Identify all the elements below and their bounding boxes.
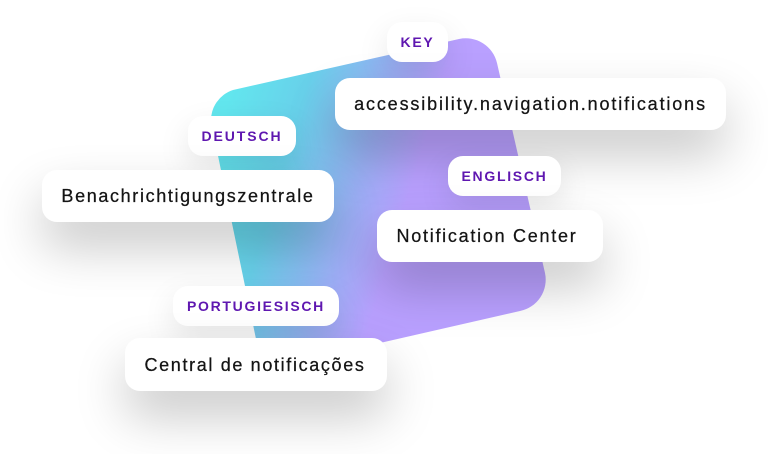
key label: KEY <box>401 34 434 50</box>
english translation card <box>377 210 603 262</box>
german label <box>188 116 296 156</box>
german translation card: Benachrichtigungszentrale <box>61 186 315 206</box>
portuguese translation card <box>125 338 387 391</box>
german translation card <box>42 170 334 222</box>
english translation card: Notification Center <box>397 226 577 246</box>
key value card <box>335 78 726 130</box>
portuguese translation card: Central de notificações <box>144 354 366 374</box>
portuguese label: PORTUGIESISCH <box>187 298 325 314</box>
english label <box>448 156 561 196</box>
key value card: accessibility.navigation.notifications <box>354 94 707 114</box>
key label <box>387 22 448 62</box>
english label: ENGLISCH <box>462 168 547 184</box>
portuguese label <box>173 286 339 326</box>
german label: DEUTSCH <box>202 128 282 144</box>
